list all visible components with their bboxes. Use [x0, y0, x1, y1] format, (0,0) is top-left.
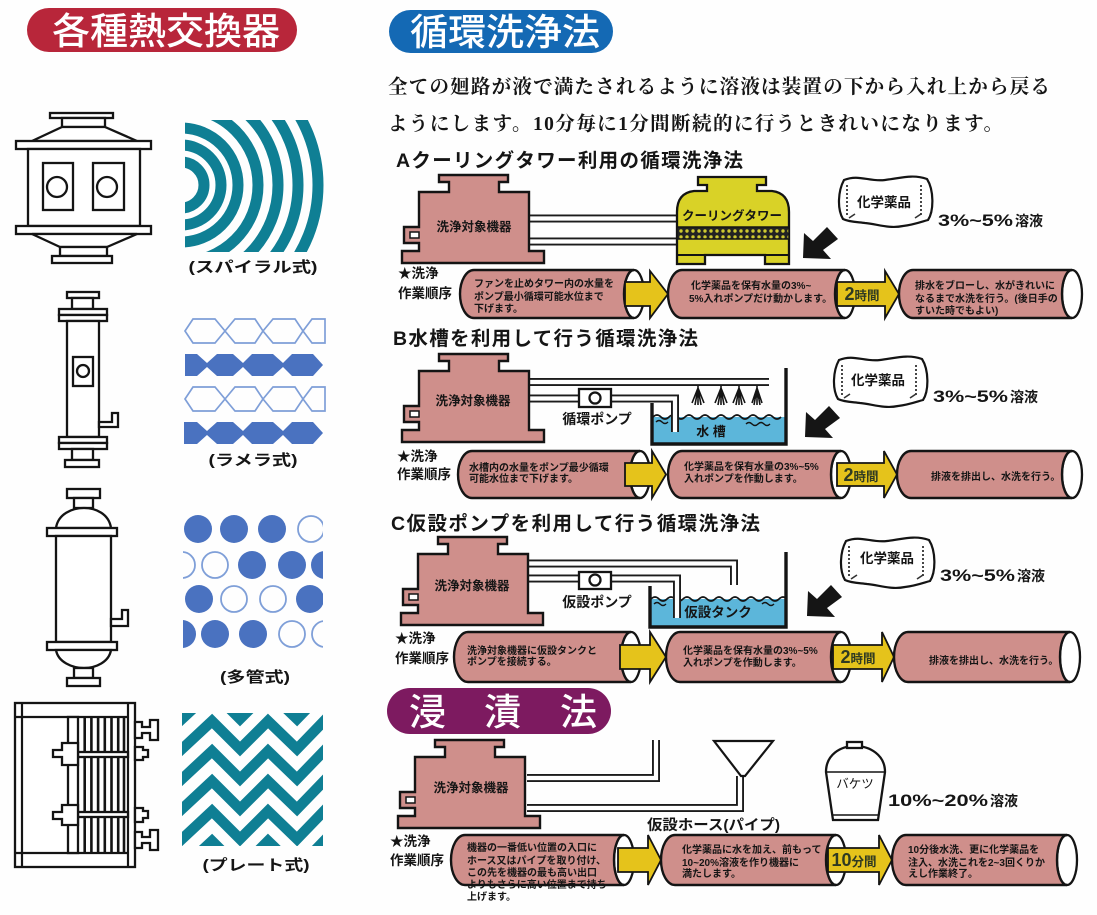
pattern: lamella: [184, 319, 325, 444]
chemicals bag C: 化学薬品: [860, 550, 914, 566]
label: shell and tube: (多管式): [220, 668, 290, 686]
pipe D2: 10~20%溶液を作り機器に: [682, 856, 799, 869]
arrow C2 with time: [833, 632, 894, 682]
tank B: [652, 368, 786, 444]
pipe D1: よりもさらに高い位置まで持ち: [467, 878, 607, 891]
work order label B: 作業順序: [397, 467, 451, 482]
pipe A1: 下げます。: [474, 302, 523, 315]
solution D: 溶液: [990, 793, 1018, 809]
section A: [396, 149, 1082, 318]
pipe D3: 10分後水洗、更に化学薬品を: [908, 843, 1039, 856]
pipe D3: [892, 835, 1077, 885]
icon: lamella exchanger: [59, 292, 118, 467]
icon: spiral exchanger: [16, 113, 151, 263]
pipe C3: 排液を排出し、水洗を行う。: [929, 654, 1058, 667]
work order label D: ★洗浄: [390, 834, 431, 849]
solution B: [933, 387, 1038, 406]
machine D: [398, 740, 540, 828]
pipe D3: 注入、水洗これを2~3回くりか: [908, 856, 1045, 869]
icon: bucket: バケツ: [836, 777, 874, 791]
section D: [390, 740, 1077, 903]
pipe B3: 排液を排出し、水洗を行う。: [931, 470, 1060, 483]
heading B: B水槽を利用して行う循環洗浄法: [393, 328, 698, 350]
arrow A: [803, 227, 838, 259]
heading: immersion cleaning: [387, 688, 611, 734]
cooling tower: クーリングタワー: [682, 208, 782, 223]
intro text: [388, 75, 1050, 135]
solution A: [938, 211, 1043, 230]
pipe A3: 排水をブローし、水がきれいに: [915, 279, 1055, 292]
solution C: 3%~5%: [940, 566, 1015, 585]
work order label D: 作業順序: [390, 853, 444, 868]
pipe C1: ポンプを接続する。: [467, 655, 557, 668]
machine A: 洗浄対象機器: [436, 219, 512, 234]
pipe D1: [451, 835, 634, 903]
work order label D: [390, 834, 444, 868]
arrow A2 with time: 2時間: [844, 284, 880, 304]
chemicals bag A: [839, 177, 932, 227]
pipe D2: [661, 835, 846, 885]
arrow D2 with time: 10分間: [831, 850, 877, 870]
icon: shell and tube exchanger: [47, 489, 128, 686]
pipes B with sprays: [529, 382, 769, 432]
machine B: 洗浄対象機器: [435, 393, 511, 408]
solution A: 溶液: [1015, 213, 1043, 229]
pipe A2: 5%入れポンプだけ動かします。: [689, 292, 832, 305]
machine C: [401, 537, 543, 625]
arrow D2 with time: [828, 835, 892, 885]
chemicals bag B: [834, 357, 927, 407]
pipe C1: 洗浄対象機器に仮設タンクと: [467, 644, 597, 657]
arrow B: [805, 406, 840, 438]
solution B: 溶液: [1010, 389, 1038, 405]
tank C: [650, 552, 787, 627]
pipe A3: すいた時でもよい): [915, 304, 998, 317]
arrow B1: [625, 451, 666, 498]
pipes C: [529, 564, 734, 618]
pipe B2: 入れポンプを作動します。: [684, 472, 803, 485]
pump B label: 循環ポンプ: [562, 411, 632, 427]
icon: funnel: [714, 741, 773, 776]
heading: immersion cleaning: 法: [560, 692, 597, 733]
work order label A: 作業順序: [398, 286, 452, 301]
machine C: 洗浄対象機器: [434, 578, 510, 593]
heading A: Aクーリングタワー利用の循環洗浄法: [396, 149, 743, 172]
pipe B2: [668, 451, 851, 498]
arrow C2 with time: 2時間: [840, 647, 876, 667]
pipe A2: 化学薬品を保有水量の3%~: [691, 279, 811, 292]
tank B: 水 槽: [696, 424, 726, 439]
pattern: spiral: [185, 120, 324, 252]
pipe B1: [458, 451, 650, 498]
icon: bucket: [826, 742, 885, 820]
pattern: tube circles: [183, 515, 323, 648]
heading C: C仮設ポンプを利用して行う循環洗浄法: [391, 513, 760, 535]
heading: heat exchangers: 各種熱交換器: [52, 11, 280, 52]
pipe D1: ホース又はパイプを取り付け、: [467, 854, 606, 867]
pipe C1: [454, 632, 641, 682]
work order label B: ★洗浄: [397, 449, 438, 464]
cooling tower: [677, 177, 789, 264]
heading: circulation cleaning: 循環洗浄法: [410, 12, 600, 53]
work order label A: ★洗浄: [398, 266, 439, 281]
pipes to tower: [529, 218, 678, 242]
intro text: 全ての廻路が液で満たされるように溶液は装置の下から入れ上から戻る: [388, 75, 1050, 98]
work order label C: [395, 631, 449, 666]
pipe D1: 上げます。: [467, 890, 516, 903]
pipe C2: 入れポンプを作動します。: [683, 656, 802, 669]
hoses D: [527, 740, 740, 808]
pipe A3: [899, 270, 1082, 318]
chemicals bag A: 化学薬品: [857, 194, 911, 210]
chemicals bag C: [841, 538, 934, 588]
pipe C2: [666, 632, 851, 682]
pipe A1: [460, 270, 644, 318]
label: spiral: (スパイラル式): [188, 259, 318, 276]
pump C: [579, 572, 611, 589]
pipe D2: 満たします。: [682, 867, 741, 880]
pump B: [579, 389, 611, 407]
label: plate: (プレート式): [202, 857, 310, 874]
arrow C: [807, 585, 842, 617]
label: lamella: (ラメラ式): [208, 452, 298, 469]
intro text: ようにします。10分毎に1分間断続的に行うときれいになります。: [388, 112, 1003, 135]
machine B: [402, 354, 544, 442]
pipe A1: ファンを止めタワー内の水量を: [474, 277, 614, 290]
work order label C: 作業順序: [395, 651, 449, 666]
section C: [391, 513, 1080, 682]
machine D: 洗浄対象機器: [433, 780, 509, 795]
arrow A2 with time: [837, 271, 899, 318]
pipe B3: [897, 451, 1082, 498]
pipe A1: ポンプ最小循環可能水位まで: [474, 290, 604, 303]
machine A: [402, 175, 544, 263]
work order label A: [398, 266, 452, 301]
solution D: 10%~20%: [888, 791, 988, 810]
heading: immersion cleaning: 浸: [409, 692, 446, 733]
pipe A3: なるまで水洗を行う。(後日手の: [915, 292, 1058, 305]
work order label C: ★洗浄: [395, 631, 436, 646]
pipe B1: 可能水位まで下げます。: [469, 472, 578, 485]
heading: immersion cleaning: 漬: [484, 692, 521, 733]
tank C: 仮設タンク: [684, 605, 752, 620]
pipe B2: 化学薬品を保有水量の3%~5%: [684, 460, 819, 473]
solution C: [940, 566, 1045, 585]
pipe A2: [668, 270, 855, 318]
pipe C2: 化学薬品を保有水量の3%~5%: [683, 644, 818, 657]
pump C label: 仮設ポンプ: [562, 594, 632, 610]
solution C: 溶液: [1017, 568, 1045, 584]
icon: plate exchanger: [15, 703, 158, 867]
section B: [393, 328, 1082, 498]
arrow A1: [625, 271, 668, 318]
arrow C1: [620, 632, 666, 682]
pattern: chevrons: [182, 713, 323, 846]
pipe D1: この先を機器の最も高い出口: [467, 866, 597, 879]
solution B: 3%~5%: [933, 387, 1008, 406]
pipe D1: 機器の一番低い位置の入口に: [467, 841, 597, 854]
arrow B2 with time: 2時間: [843, 465, 879, 485]
arrow D1: [618, 835, 661, 885]
work order label B: [397, 449, 451, 482]
pipe D3: えし作業終了。: [908, 867, 978, 880]
solution A: 3%~5%: [938, 211, 1013, 230]
chemicals bag B: 化学薬品: [851, 372, 905, 388]
arrow B2 with time: [837, 451, 897, 498]
hose label: 仮設ホース(パイプ): [647, 817, 780, 834]
pipe C3: [894, 632, 1080, 682]
pipe B1: 水槽内の水量をポンプ最少循環: [469, 461, 609, 474]
pipe D2: 化学薬品に水を加え、前もって: [682, 843, 822, 856]
solution D: [888, 791, 1018, 810]
